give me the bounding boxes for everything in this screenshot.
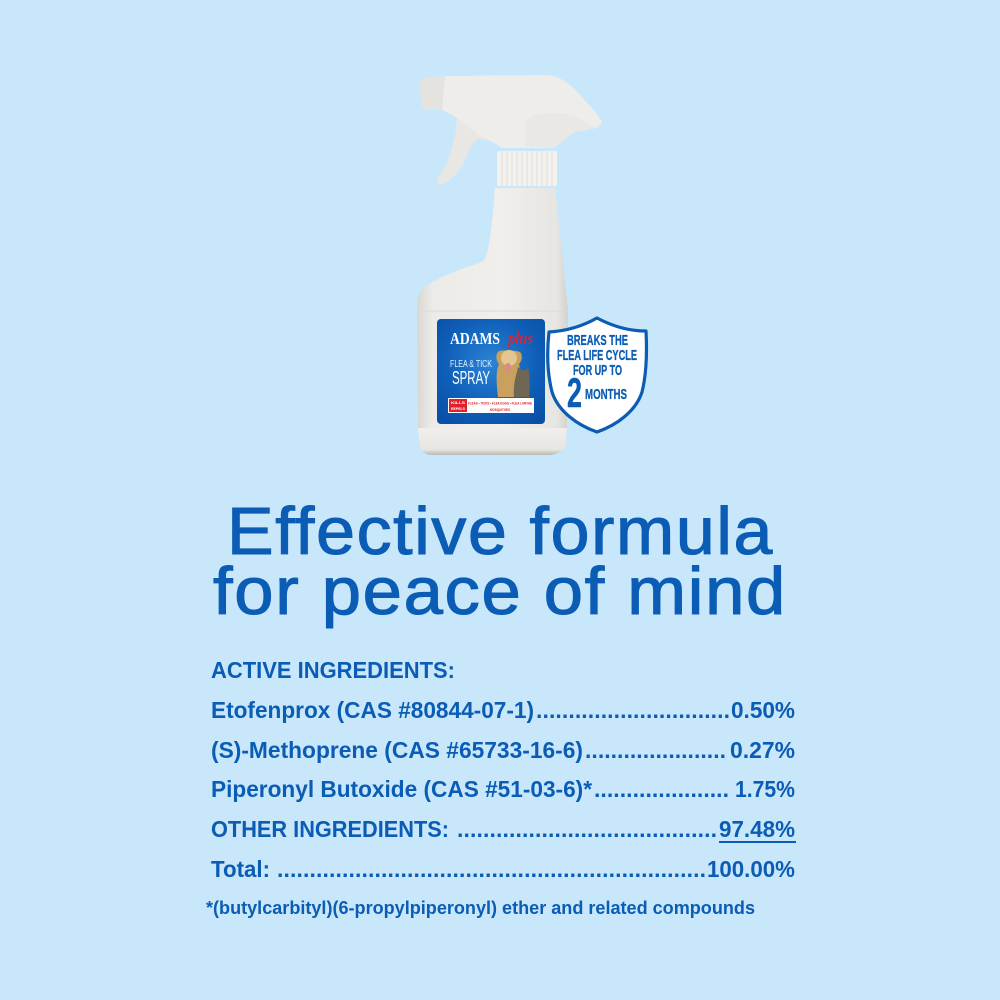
shield line two: FLEA LIFE CYCLE (557, 347, 637, 364)
badge: shield (548, 318, 647, 432)
row: etofenprox (211, 697, 795, 723)
bottle trigger lever (437, 118, 490, 185)
claims text: FLEAS • TICKS • FLEA EGGS • FLEA LARVAE (468, 400, 532, 406)
row: total: 100.00% (707, 856, 795, 882)
row: etofenprox: Etofenprox (CAS #80844-07-1) (211, 697, 534, 723)
row: other ingredients: OTHER INGREDIENTS: (211, 816, 449, 842)
claims sub text: MOSQUITOES (490, 407, 510, 412)
shield months: MONTHS (585, 386, 627, 403)
spray head (442, 75, 602, 148)
bottle shoulder seam (417, 310, 568, 312)
row: piperonyl butoxide: Piperonyl Butoxide (CAS #51-03-6)* (211, 776, 592, 802)
badge text: KILLS (451, 400, 465, 405)
row: piperonyl butoxide: ..................... (594, 776, 729, 802)
spray nozzle (419, 76, 445, 110)
row: etofenprox: 0.50% (731, 697, 795, 723)
active ingredients heading: ACTIVE INGREDIENTS: (211, 657, 455, 683)
shield outline (548, 318, 647, 432)
row: methoprene: (S)-Methoprene (CAS #65733-16-6) (211, 737, 583, 763)
row: other ingredients: ........................................ (457, 816, 717, 842)
bottle collar (497, 151, 557, 186)
spray head highlight (525, 113, 597, 148)
cat photo (514, 367, 530, 397)
row: methoprene (211, 737, 795, 763)
brand name: ADAMS (450, 329, 500, 348)
shield line three: FOR UP TO (573, 362, 622, 379)
title (213, 494, 787, 629)
product name line one: FLEA & TICK (450, 358, 492, 370)
row: total: .................................................................. (277, 856, 706, 882)
product name line two: SPRAY (452, 368, 490, 388)
red badge (449, 399, 467, 412)
row: other ingredients: 97.48% (719, 816, 795, 842)
footnote: *(butylcarbityl)(6-propylpiperonyl) ether and related compounds (206, 898, 755, 918)
row: piperonyl butoxide (211, 776, 795, 802)
dog photo (496, 350, 522, 397)
row: total: Total: (211, 856, 270, 882)
brand plus: plus (506, 329, 533, 348)
title line one: Effective formula (227, 494, 774, 569)
row: methoprene: ...................... (585, 737, 726, 763)
shield line one: BREAKS THE (567, 332, 628, 349)
row: piperonyl butoxide: 1.75% (735, 776, 795, 802)
claims strip (448, 398, 534, 413)
row: etofenprox: .............................. (536, 697, 730, 723)
title line two: for peace of mind (213, 554, 787, 629)
shield number: 2 (567, 369, 582, 416)
bottle base (418, 428, 567, 455)
row: methoprene: 0.27% (730, 737, 795, 763)
badge text two: REPELS (451, 406, 465, 411)
bottle neck and body (417, 188, 568, 454)
product: spray bottle (417, 75, 602, 455)
product label (437, 319, 545, 424)
ingredients list (206, 657, 796, 918)
row: other ingredients (211, 816, 796, 843)
